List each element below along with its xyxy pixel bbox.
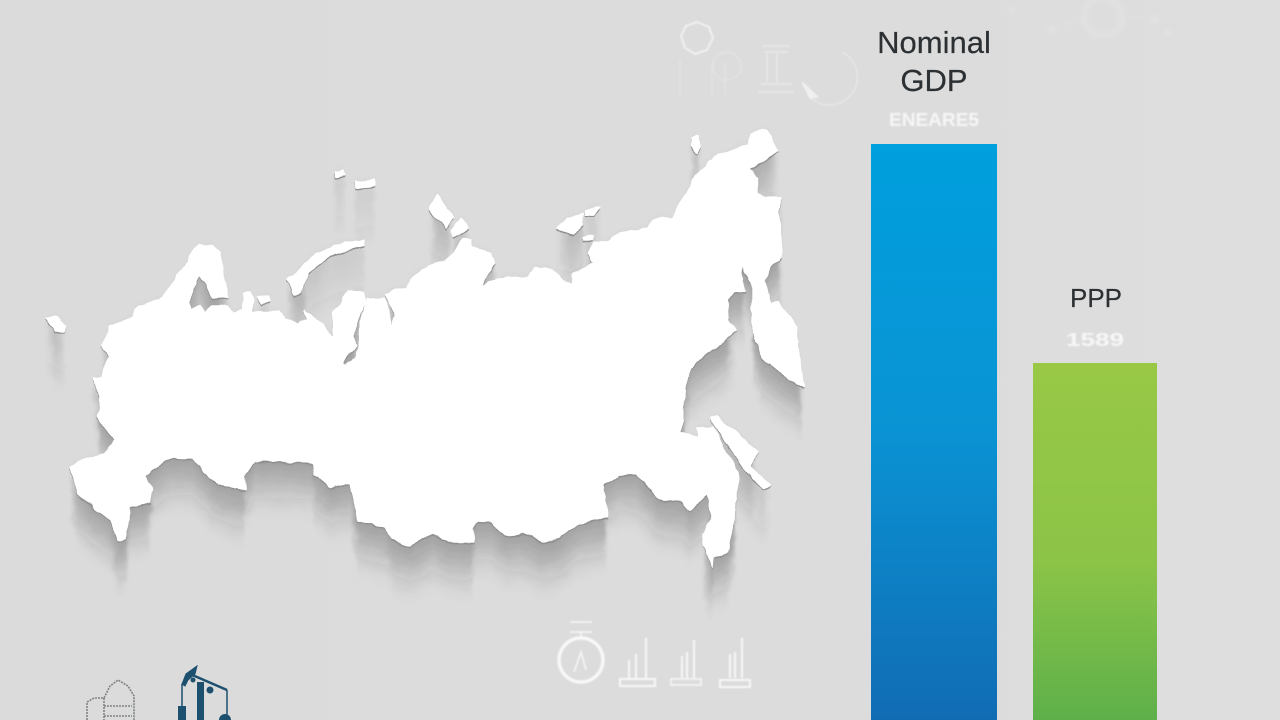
faint icons top centre xyxy=(680,22,857,105)
icon: compass dial xyxy=(713,52,857,105)
map of Russia with drop shadow xyxy=(46,130,803,622)
label: Nominal GDP: Nominal xyxy=(877,25,991,60)
icon: oil pump jack xyxy=(178,666,231,720)
icon: outlined plant bottom left xyxy=(87,680,134,720)
value: PPP: 1589 xyxy=(1066,330,1124,350)
icon: stopwatch xyxy=(559,622,603,682)
label: Nominal GDP: GDP xyxy=(900,63,968,98)
bar: PPP xyxy=(1033,283,1157,720)
map shadow xyxy=(46,131,803,622)
blue bar xyxy=(871,144,997,720)
icon: gear ring xyxy=(681,22,713,54)
label: PPP: PPP xyxy=(1070,283,1122,313)
icon: bar group 2 xyxy=(671,640,701,685)
value: Nominal GDP: ENEARE5 xyxy=(889,110,979,130)
bar: Nominal GDP xyxy=(871,25,997,720)
icon: columns building xyxy=(680,46,794,95)
icon: bar group 3 xyxy=(720,638,750,687)
faint icons top right xyxy=(1009,0,1171,36)
map landmass xyxy=(46,130,803,567)
white icons bottom centre xyxy=(559,622,750,687)
icon: bar group 1 xyxy=(620,638,655,686)
green bar xyxy=(1033,363,1157,720)
map edge xyxy=(46,132,803,568)
